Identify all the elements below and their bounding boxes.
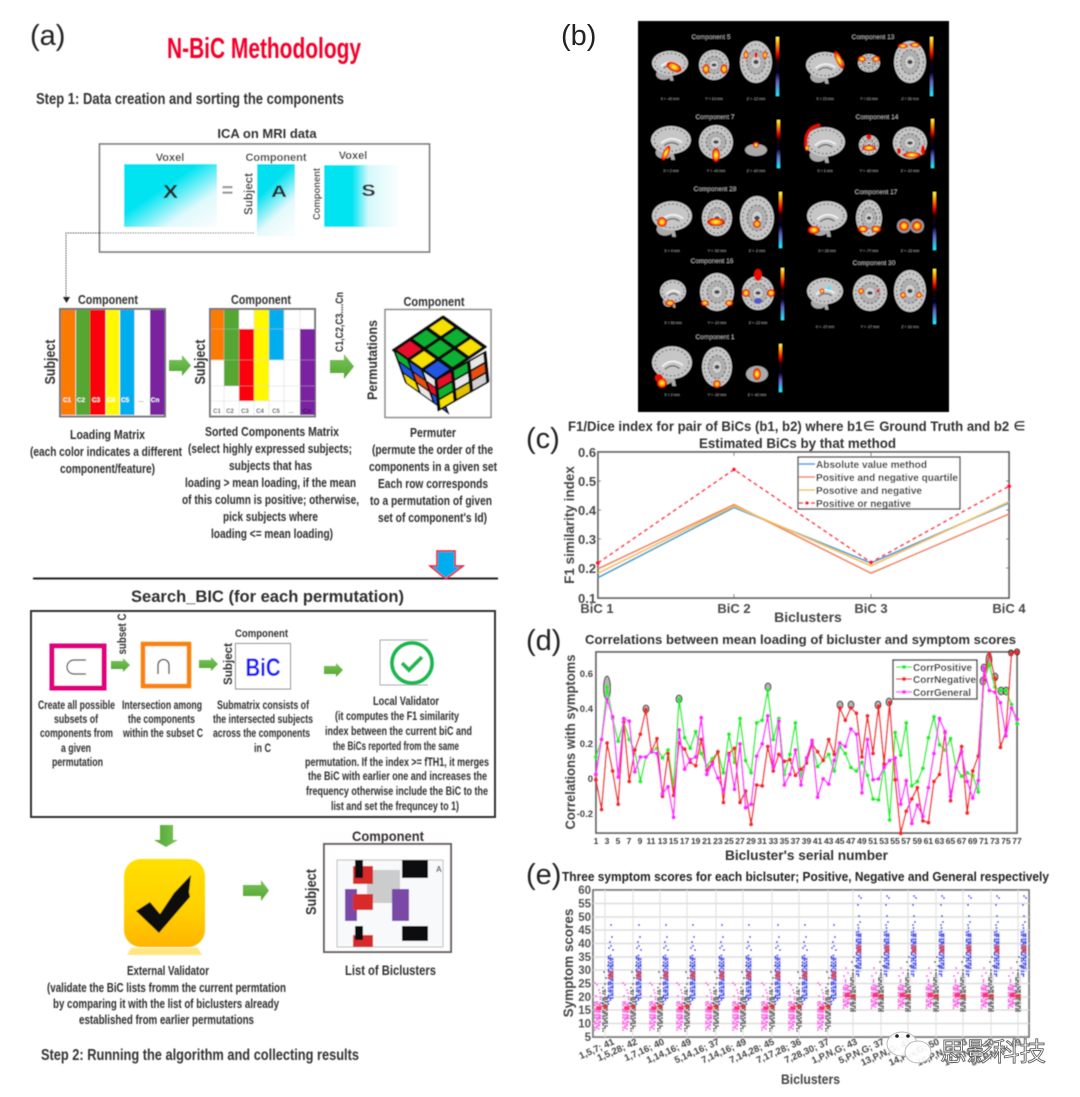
caption: local validator: (it computes the F1 similarity [335,711,459,723]
biclusters list matrix: Subject [304,869,320,915]
caption: sorted components matrix [182,424,359,541]
caption: loading matrix: (each color indicates a different [30,444,183,459]
caption: permuter: (permute the order of the [372,442,493,457]
caption: external validator: by comparing it with the list of biclusters already [53,996,280,1011]
biclusters list matrix: A [436,865,442,874]
caption: sorted components matrix: loading <= mean loading) [211,526,333,541]
chart title e: Three symptom scores for each biclsuter; Positive, Negative and General respectively [562,870,1049,884]
legend c: Absolute value method [816,459,927,471]
panel b: brain component maps [638,21,949,412]
brain map: component 28: X = 4 mm [664,249,680,253]
series: CorrGeneral [596,668,1017,824]
chart frame and axes c [562,445,1026,625]
brain map: component 1: Y = -39 mm [708,393,726,397]
significance ovals d [604,649,1020,713]
arrow: subset to intersection [111,658,130,672]
loading matrix: Subject [43,339,59,384]
brain map: component 1: Z = -60 mm [748,393,766,397]
chart frame and axes d: 59 [913,836,922,846]
sorted components matrix: C5 [272,409,280,415]
section divider line [33,578,498,580]
chart frame and axes d: 27 [735,836,745,846]
brain map: component 30: Component 30 [853,260,896,267]
caption: sorted components matrix: Sorted Components Matrix [205,424,340,439]
icon: subset [52,646,104,688]
x tick labels e: 1,5,7; 41 [577,1036,617,1062]
chart frame and axes c: BiC 2 [717,601,751,616]
caption: local validator: frequency otherwise include the BiC to the [306,786,488,798]
x tick labels e: 7,14,16; 49 [700,1037,748,1066]
caption: local validator: index between the current biC and [325,726,472,738]
chart title c: Estimated BiCs by that method [699,436,896,451]
brain map: component 16: X = 56 mm [664,321,682,325]
chart frame and axes d: 63 [935,836,944,846]
brain map: component 7 [651,114,780,173]
chart frame and axes d: 43 [824,836,834,846]
chart frame and axes d: 11 [646,836,656,846]
brain map: component 16: Component 16 [691,258,734,265]
chart frame and grid e: 60 [578,885,591,897]
chart frame and axes d: 9 [638,836,643,846]
brain map: component 14: Z = -10 mm [901,169,919,173]
ICA on MRI data block: ICA on MRI data [217,126,317,141]
panel a: N-BiC methodology [30,20,498,1064]
legend c: Positive and negative quartile [816,472,958,484]
chart title c [568,419,1026,451]
ICA on MRI data block: Component [245,152,307,164]
x tick labels e: 1,14,16; 49 [645,1037,693,1066]
chart frame and axes d: 29 [746,836,756,846]
chart frame and axes d: 13 [658,836,667,846]
brain map: component 30 [807,260,936,329]
caption: subsets: Create all possible [38,700,115,712]
chart frame and axes d: 0.2 [580,739,593,750]
caption: permuter: to a permutation of given [370,493,492,508]
panel label d: (d) [526,625,561,657]
chart frame and axes d [563,652,1022,863]
legend d [893,660,977,699]
brain map: component 5: X = -40 mm [661,97,679,101]
brain map: component 14: Y = -89 mm [860,169,878,173]
chart frame and grid e: 25 [578,978,592,990]
chart frame and grid e: 30 [578,965,591,977]
chart frame and axes d: -0.2 [577,809,593,820]
x tick labels e [577,1036,1023,1069]
caption: external validator: established from earlier permutations [79,1012,254,1027]
loading matrix: Component [78,292,139,307]
caption: sorted components matrix: loading > mean loading, if the mean [185,475,356,490]
caption: external validator: External Validator [127,963,209,978]
chart frame and axes d: 73 [990,836,1000,846]
x tick labels e: 5,14,16; 37 [673,1037,721,1066]
brain map: component 5: Y = 14 mm [705,97,723,101]
rotated label: component list: C1,C2,C3....Cn [334,292,346,352]
chart frame and grid e [561,885,1029,1044]
icon: intersection [143,644,189,686]
caption: local validator: list and set the frequncey to 1) [331,801,459,813]
caption: sorted components matrix: subjects that has [229,458,312,473]
line series c [598,470,1009,578]
legend d: CorrPositive [913,662,972,674]
chart frame and axes c: 0.1 [578,591,596,606]
arrow: intersection to BiC [199,657,218,671]
chart frame and axes d: 69 [968,836,978,846]
BiC submatrix: Component [235,628,288,640]
heading: step 1: Step 1: Data creation and sorting the components [36,91,344,108]
sorted components matrix: C4 [256,409,264,415]
chart frame and axes c: BiC 3 [854,601,888,616]
title: N-BiC Methodology [167,33,361,65]
chart frame and axes d: 53 [879,836,889,846]
caption: local validator: the BiCs reported from the same [333,741,459,753]
brain map: component 28: Component 28 [694,186,737,193]
chart frame and axes d: 67 [957,836,967,846]
permuter: rubik cube [364,294,491,418]
ICA on MRI data block: Voxel [339,150,367,162]
heading: search_BIC: Search_BIC (for each permutation) [131,587,404,606]
brain map: component 5 [652,34,779,101]
arrow: validator to list of biclusters [243,880,269,901]
chart frame and axes d: 39 [802,836,811,846]
x tick labels e: 14,P,N,G; 50 [887,1037,941,1069]
brain map: component 16: Z = -22 mm [749,321,767,325]
brain map: component 5: Z = -12 mm [747,97,765,101]
chart frame and axes d: 57 [901,836,911,846]
brain map: component 13: Y = 63 mm [860,97,878,101]
caption: submatrix: across the components [213,728,310,740]
brain map: component 28: Z = -2 mm [749,249,765,253]
chart frame and grid e: 45 [578,925,592,937]
brain map: component 1 [652,334,782,397]
caption: local validator [305,696,489,813]
legend d: CorrNegative [913,674,976,686]
loading matrix: C2 [77,397,86,404]
sorted components matrix: Cn [303,409,311,415]
chart frame and axes d: 23 [713,836,723,846]
caption: sorted components matrix: (select highly expressed subjects; [188,441,352,456]
panel label a: (a) [30,20,65,52]
chart frame and axes c: 0.3 [578,532,596,547]
brain map: component 28 [652,186,782,253]
caption: subsets [38,700,115,769]
caption: loading matrix [30,427,183,476]
brain map: component 1: X = 2 mm [664,393,680,397]
caption: intersection: Intersection among [122,700,202,712]
icon: local validator check [380,640,432,685]
loading matrix: C3 [92,397,101,404]
caption: sorted components matrix: pick subjects where [223,509,318,524]
x tick labels e: 7,17,28; 36 [755,1037,803,1066]
chart frame and axes c: BiC 1 [580,601,614,616]
sorted components matrix: Subject [193,339,209,384]
chart frame and axes d: 37 [791,836,800,846]
loading matrix: C1 [63,397,72,404]
chart frame and grid e: 20 [578,992,591,1004]
ICA on MRI data block [100,126,430,252]
x tick labels e: 1,5,28; 42 [596,1037,639,1064]
loading matrix: C4 [107,397,116,404]
ICA on MRI data block: Voxel [156,152,184,164]
sorted components matrix: C1 [213,409,221,415]
x tick labels e: 5,P,N,G; 37 [837,1037,886,1067]
x tick labels e: 1,7,16; 40 [623,1037,666,1064]
caption: loading matrix: Loading Matrix [70,427,146,442]
brain map: component 13: Component 13 [852,34,895,41]
watermark: 思影科技 [940,1037,1046,1067]
chart frame and axes d: 35 [780,836,789,846]
caption: external validator [47,963,286,1027]
brain map: component 17: Y = -77 mm [860,249,878,253]
chart frame and axes d: 55 [890,836,900,846]
caption: sorted components matrix: of this column is positive; otherwise, [182,492,359,507]
chart frame and axes d: 47 [846,836,856,846]
caption: local validator: the BiC with earlier one and increases the [308,771,487,783]
caption: permuter: Each row corresponds [378,476,488,491]
sorted components matrix: ... [288,409,294,415]
caption: local validator: permutation. If the index >= fTH1, it merges [305,757,489,769]
caption: submatrix: Submatrix consists of [217,700,309,712]
panel label b: (b) [561,20,596,52]
panel label e: (e) [526,859,561,891]
ICA on MRI data block: = [222,180,233,202]
chart frame and axes d: 0 [588,774,593,785]
chart frame and axes c: F1 similarity index [562,466,577,584]
brain map: component 13 [806,34,933,101]
series: CorrPositive [596,664,1017,820]
chart frame and axes c: 0.4 [578,503,597,518]
x tick labels e: 30,P,N,G; 49 [969,1037,1023,1069]
arrow: sorted to permuter [330,354,354,379]
chart frame and axes c: 0.6 [578,445,596,460]
brain map: component 14 [805,114,934,173]
x tick labels e: 7,14,28; 45 [728,1036,777,1066]
brain map: component 28: Y = -50 mm [708,249,726,253]
chart frame and axes d: 61 [924,836,933,846]
biclusters list matrix [304,828,451,952]
chart frame and axes d: 0.6 [580,669,593,680]
chart title d: Correlations between mean loading of bicluster and symptom scores [585,632,1016,647]
chart frame and axes d: 45 [835,836,845,846]
caption: loading matrix: component/feature) [60,461,155,476]
legend c: Positive or negative [816,498,911,510]
brain map: component 13: X = 23 mm [816,97,834,101]
sorted components matrix [193,292,315,416]
permuter: rubik cube: Component [404,294,465,309]
caption: subsets: subsets of [54,714,98,726]
brain map: component 14: X = 1 mm [817,169,833,173]
arrow: down to external validator [154,825,178,847]
series: CorrNegative [596,652,1017,833]
arrow: BiC to local validator [324,663,343,677]
dashed connector arrow [63,233,254,303]
ICA on MRI data block: Component [312,167,323,220]
brain map: component 30: Z = 16 mm [901,325,919,329]
brain map: component 7: Y = -40 mm [707,169,725,173]
legend c: Posotive and negative [816,485,922,497]
sorted components matrix: C3 [241,409,249,415]
caption: submatrix: in C [254,743,271,755]
caption: subsets: a given [61,743,91,755]
caption: submatrix: the intersected subjects [213,714,313,726]
x tick labels e: 16,P,N,G; 43 [915,1037,969,1069]
brain map: component 16: Y = -10 mm [708,321,726,325]
caption: external validator: (validate the BiC lists fromm the current permtation [47,980,286,995]
caption: intersection: within the subset C [122,728,203,740]
chart frame and axes d: 3 [605,836,610,846]
arrow: loading to sorted [169,355,191,376]
icon: external validator check [124,859,205,955]
caption: subsets: permutation [52,757,103,769]
brain map: component 30: Y = -27 mm [861,325,879,329]
sorted components matrix: C2 [226,409,234,415]
sorted components matrix: Component [231,292,292,307]
chart frame and axes d: 33 [769,836,778,846]
rotated label: subset C: subset C [117,614,129,654]
BiC submatrix: Subject [221,643,235,685]
loading matrix: ... [138,397,144,404]
caption: local validator: Local Validator [373,696,439,708]
panel d: correlations chart [526,625,1022,863]
chart frame and axes d: 65 [946,836,955,846]
caption: subsets: components from [40,728,113,740]
x tick labels e: 17,P,N,G; 40 [942,1037,996,1069]
loading matrix: Cn [151,397,159,404]
ICA on MRI data block: Subject [242,173,256,215]
arrow: blue down with red outline [430,551,463,579]
chart title c: F1/Dice index for pair of BiCs (b1, b2) where b1∈ Ground Truth and b2 ∈ [568,419,1026,434]
chart frame and grid e: 35 [578,952,592,964]
ICA on MRI data block: S [362,181,376,200]
scatter groups e [594,896,1027,1031]
caption: submatrix [213,700,313,755]
chart frame and axes d: 17 [680,836,690,846]
chart frame and axes c: Biclusters [774,609,842,625]
brain map: component 7: X = 2 mm [663,169,679,173]
legend d: CorrGeneral [913,687,971,699]
chart frame and axes d: Bicluster's serial number [725,847,889,863]
watermark [887,1032,1046,1067]
chart frame and grid e: 15 [578,1005,592,1017]
brain map: component 5: Component 5 [691,34,731,41]
ICA on MRI data block: X [163,182,178,202]
chart frame and axes d: 71 [979,836,989,846]
chart frame and axes d: 75 [1001,836,1011,846]
panel label c: (c) [526,423,560,455]
chart frame and axes d: 49 [857,836,867,846]
brain map: component 17 [807,189,936,253]
chart frame and axes d: Correlations with symptoms [563,654,578,830]
biclusters list matrix: Component [352,828,424,844]
chart frame and axes d: 5 [616,836,621,846]
chart frame and grid e: Symptom scores [561,909,576,1017]
caption: intersection: the components [128,714,195,726]
chart frame and grid e: 55 [578,898,592,910]
x axis label e: Biclusters [781,1071,840,1087]
caption: intersection [122,700,203,740]
chart frame and axes d: 51 [868,836,878,846]
brain map: component 16 [660,258,784,325]
brain map: component 1: Component 1 [695,334,735,341]
chart frame and axes c: 0.2 [578,561,596,576]
panel e: symptom score scatter [526,859,1049,1087]
x tick labels e: 1,P,N,G; 43 [810,1037,859,1067]
brain map: component 13: Z = 35 mm [901,97,919,101]
brain map: component 7: Z = -60 mm [747,169,765,173]
chart frame and axes d: 1 [594,836,599,846]
permuter: rubik cube: Permutations [364,320,380,400]
caption: permuter: set of component's Id) [378,510,487,525]
chart frame and axes d: 41 [813,836,823,846]
chart frame and axes d: 77 [1012,836,1022,846]
chart frame and axes d: 25 [724,836,734,846]
legend c [798,457,960,510]
brain map: component 30: X = -37 mm [816,325,834,329]
x tick labels e: 7,28,30; 37 [783,1037,831,1066]
brain map: component 17: Z = -33 mm [901,249,919,253]
panel c: F1 line chart [526,419,1026,625]
loading matrix [43,292,165,416]
brain map: component 7: Component 7 [695,114,735,121]
caption: list of biclusters: List of Biclusters [345,962,436,978]
caption: permuter [369,425,498,525]
chart frame and axes c: BiC 4 [992,601,1026,616]
chart frame and axes d: 7 [627,836,632,846]
chart frame and axes d: 31 [757,836,767,846]
x tick labels e: 13,P,N,G; 41 [859,1036,914,1069]
caption: permuter: components in a given set [369,459,498,474]
loading matrix: C5 [121,397,130,404]
panel: search box [31,611,495,817]
chart frame and axes c: 0.5 [578,474,596,489]
chart frame and grid e: 50 [578,912,591,924]
caption: permuter: Permuter [410,425,456,440]
brain map: component 17: X = 28 mm [818,249,836,253]
BiC submatrix: BiC [246,654,280,682]
chart frame and axes d: 15 [669,836,678,846]
chart frame and axes d: 21 [702,836,712,846]
chart frame and grid e: 5 [585,1032,592,1044]
chart frame and axes d: 0.4 [580,704,594,715]
heading: step 2: Step 2: Running the algorithm and collecting results [41,1047,359,1064]
brain map: component 14: Component 14 [856,114,899,121]
brain map: component 17: Component 17 [855,189,898,196]
BiC submatrix [221,628,290,689]
chart frame and grid e: 40 [578,938,591,950]
chart frame and grid e: 10 [578,1018,591,1030]
ICA on MRI data block: A [271,182,287,201]
chart frame and axes d: 19 [691,836,701,846]
